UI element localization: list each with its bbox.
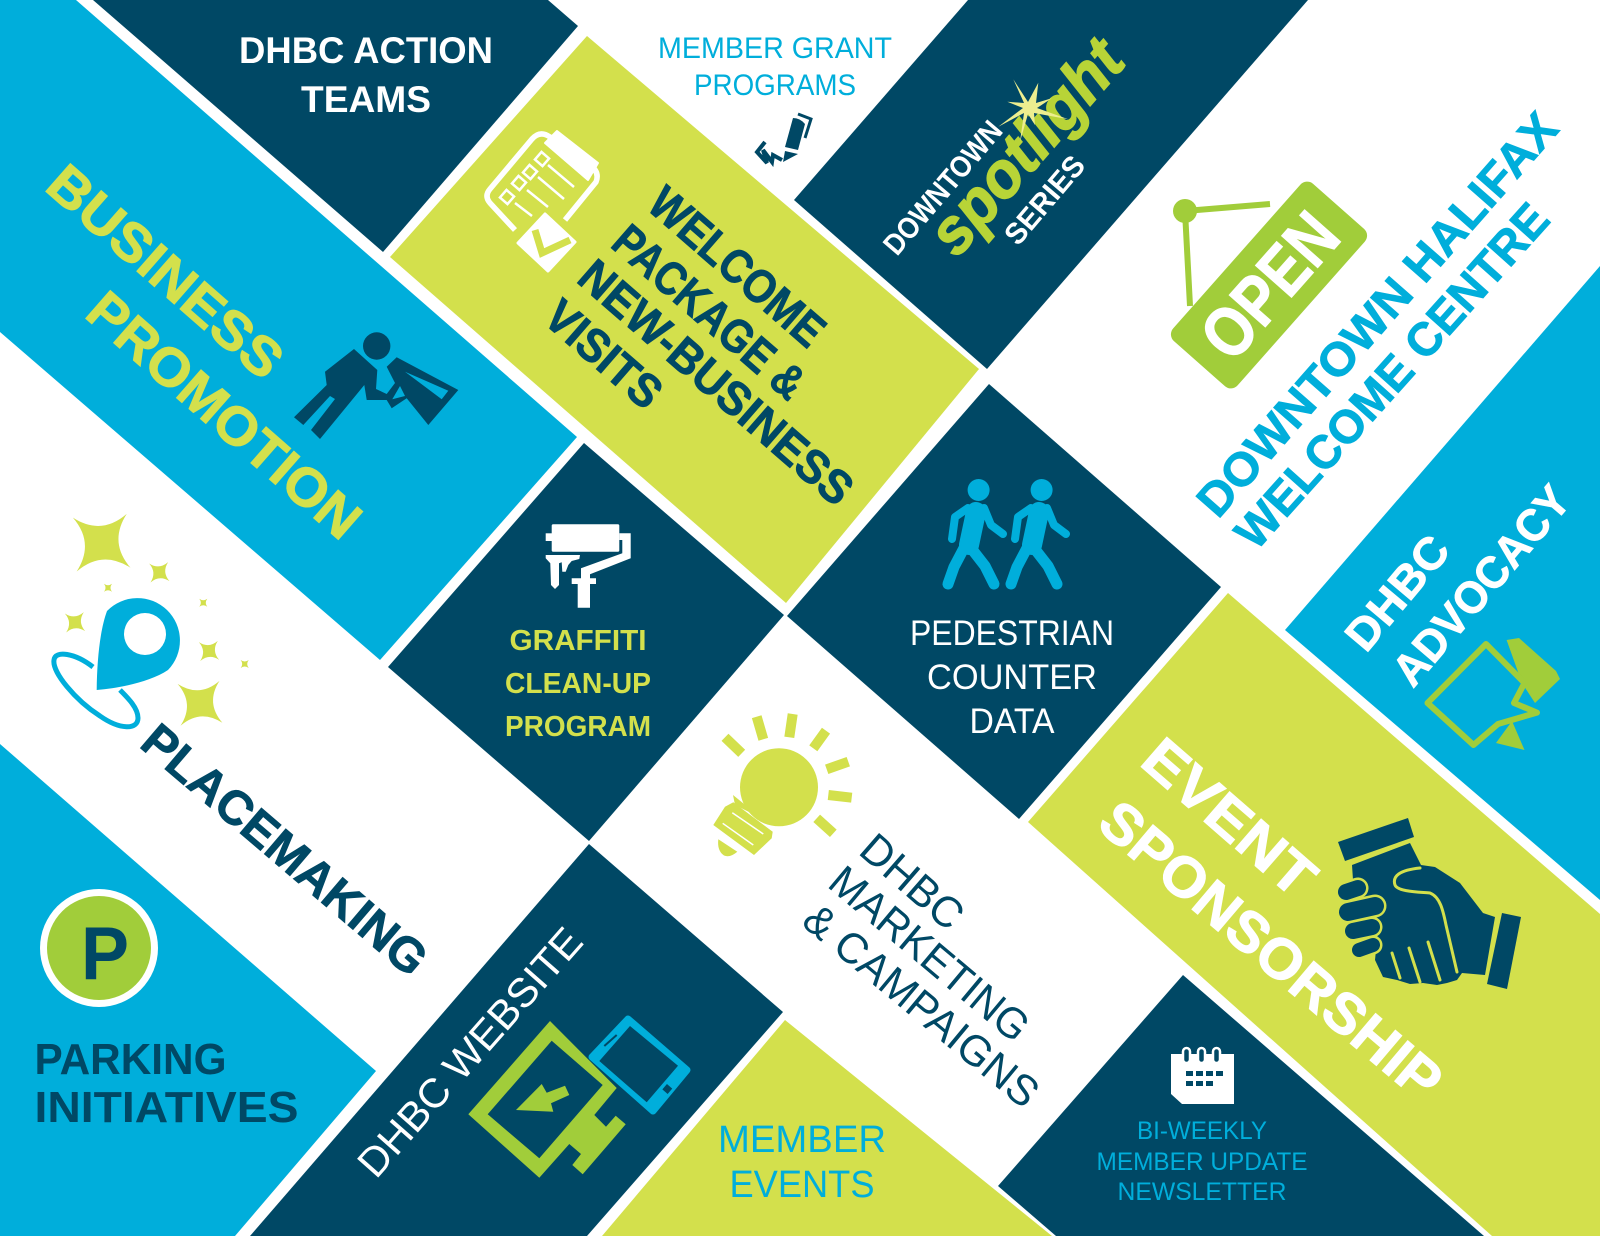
panel: event sponsorship [1028, 593, 1600, 1236]
icon: calendar [1171, 1048, 1234, 1104]
text: pedestrian counter data: COUNTER [927, 658, 1097, 697]
icon: person with megaphone [294, 332, 458, 439]
heading: welcome package and new-business visits: VISITS [534, 289, 673, 419]
heading: event sponsorship: EVENT [1129, 726, 1329, 910]
text: DHBC action teams [239, 30, 493, 120]
icon: two pedestrians [948, 479, 1066, 584]
text: pedestrian counter data [910, 614, 1114, 741]
text block: member grant programs: MEMBER GRANT [658, 32, 892, 65]
icon: clipboard checklist [487, 131, 598, 271]
text: downtown: DOWNTOWN [877, 115, 1009, 262]
icon: light bulb [713, 714, 852, 856]
text: graffiti clean-up program: GRAFFITI [510, 625, 646, 657]
text block: member grant programs [658, 32, 892, 102]
heading: parking initiatives: INITIATIVES [34, 1083, 298, 1132]
heading: welcome package and new-business visits: NEW-BUSINESS [568, 249, 864, 516]
text: graffiti clean-up program: CLEAN-UP [505, 668, 651, 700]
icon: map pin with sparkles [54, 514, 249, 727]
panel: DHBC website [250, 844, 783, 1236]
icon: monitor and tablet [468, 1019, 687, 1178]
heading: downtown halifax welcome centre: WELCOME CENTRE [1224, 192, 1559, 559]
panel: business promotion [0, 0, 577, 660]
heading: DHBC advocacy: ADVOCACY [1382, 475, 1580, 695]
panel: member events [602, 1020, 1052, 1236]
text: bi-weekly member update newsletter: NEWSLETTER [1118, 1178, 1286, 1206]
panel: downtown halifax welcome centre [1167, 102, 1568, 559]
heading: welcome package and new-business visits: WELCOME [638, 176, 836, 357]
heading: welcome package and new-business visits: PACKAGE & [602, 214, 817, 410]
heading: business promotion [35, 153, 373, 551]
panel: pedestrian counter data [787, 384, 1221, 819]
panel: placemaking [54, 514, 438, 987]
heading: event sponsorship: SPONSORSHIP [1087, 788, 1454, 1114]
text: DHBC action teams: DHBC ACTION [239, 30, 493, 71]
text: bi-weekly member update newsletter: BI-WEEKLY [1137, 1117, 1267, 1145]
heading: DHBC marketing and campaigns: DHBC [850, 824, 973, 940]
icon: handshake [1338, 818, 1521, 989]
icon: open sign: OPEN [1185, 197, 1355, 374]
panel: DHBC advocacy [1285, 266, 1600, 900]
text: member events: MEMBER [718, 1119, 886, 1161]
text: pedestrian counter data: DATA [970, 702, 1055, 741]
heading: DHBC website: DHBC WEBSITE [348, 918, 592, 1186]
icon: parking circle: P [81, 911, 129, 995]
panel: DHBC action teams [93, 0, 578, 252]
text: member events [718, 1119, 886, 1206]
text: DHBC action teams: TEAMS [301, 79, 431, 120]
text: spotlight: spotlight [913, 23, 1140, 268]
icon: pen signature [757, 114, 811, 163]
text: member events: EVENTS [730, 1164, 874, 1206]
heading: welcome package and new-business visits [534, 176, 864, 516]
text block: member grant programs: PROGRAMS [694, 69, 856, 102]
panel: downtown spotlight series [794, 0, 1308, 369]
panel: bi-weekly member update newsletter [998, 975, 1484, 1236]
panel: parking initiatives [0, 744, 376, 1236]
text: graffiti clean-up program: PROGRAM [505, 711, 651, 743]
panel: DHBC marketing and campaigns [713, 714, 1048, 1118]
heading: DHBC marketing and campaigns: & CAMPAIGNS [794, 895, 1048, 1118]
icon: paint roller [546, 524, 631, 608]
panel: welcome package [390, 36, 979, 603]
text: graffiti clean-up program [505, 625, 651, 743]
icon: parking circle [40, 889, 158, 1007]
heading: parking initiatives [34, 1035, 298, 1132]
heading: business promotion: PROMOTION [75, 280, 373, 551]
icon: star burst [998, 79, 1068, 142]
heading: placemaking: PLACEMAKING [131, 714, 438, 987]
heading: DHBC advocacy: DHBC [1335, 525, 1460, 660]
heading: DHBC marketing and campaigns: MARKETING [820, 857, 1039, 1052]
text: pedestrian counter data: PEDESTRIAN [910, 614, 1114, 653]
heading: parking initiatives: PARKING [34, 1035, 226, 1084]
heading: downtown halifax welcome centre: DOWNTOWN HALIFAX [1186, 102, 1568, 527]
text: series: SERIES [998, 149, 1092, 252]
icon: speech bubbles [1428, 638, 1560, 750]
text: bi-weekly member update newsletter [1096, 1117, 1308, 1206]
heading: business promotion: BUSINESS [35, 153, 295, 391]
panel: graffiti clean-up program [388, 443, 784, 841]
text: bi-weekly member update newsletter: MEMBER UPDATE [1096, 1148, 1308, 1176]
